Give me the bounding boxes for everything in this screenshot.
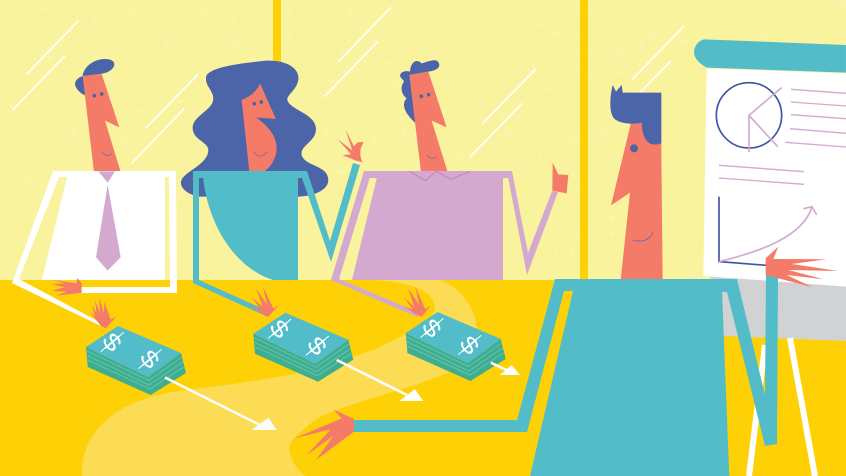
glass reflections bbox=[13, 7, 684, 163]
presenter bbox=[294, 85, 838, 476]
line chart bbox=[719, 197, 817, 265]
thumbs up hand bbox=[552, 163, 568, 193]
text lines bbox=[719, 89, 846, 184]
woman raised hand bbox=[338, 130, 364, 162]
tie bbox=[96, 171, 121, 271]
stack edges bbox=[253, 334, 353, 382]
window posts bbox=[273, 0, 588, 285]
money stack 1 bbox=[86, 326, 186, 395]
white shirt and arms bbox=[12, 171, 177, 327]
presenter face bbox=[611, 120, 663, 280]
hand on money bbox=[89, 297, 116, 328]
table bbox=[0, 280, 846, 476]
presenter pointing hand bbox=[766, 247, 838, 287]
dollar sign: $ bbox=[135, 344, 166, 374]
lilac man head bbox=[409, 72, 448, 172]
presenter hair bbox=[610, 85, 661, 145]
dollar sign: $ bbox=[417, 313, 448, 343]
bill top bbox=[253, 313, 348, 364]
woman teal top and arms bbox=[193, 163, 360, 317]
dollar sign: $ bbox=[302, 331, 333, 361]
woman hand on money bbox=[250, 286, 279, 317]
pie chart bbox=[716, 83, 782, 152]
light reflection on table bbox=[82, 280, 477, 476]
arrow from stack 2 bbox=[337, 360, 423, 401]
stack edges bbox=[86, 347, 186, 395]
arrow from stack 3 bbox=[491, 363, 520, 375]
money stack 3 bbox=[406, 312, 506, 381]
dollar sign: $ bbox=[454, 330, 485, 360]
woman face bbox=[242, 83, 277, 172]
bill top bbox=[406, 312, 501, 363]
man in lilac sweater bbox=[331, 60, 568, 317]
chart top bar bbox=[694, 39, 846, 73]
flipchart stand bbox=[710, 276, 846, 476]
lilac man hand on money bbox=[403, 286, 431, 317]
money stack 2 bbox=[253, 313, 353, 382]
man with tie bbox=[12, 59, 177, 328]
arrow from stack 1 bbox=[165, 378, 277, 430]
bill top bbox=[86, 326, 181, 377]
curly hair bbox=[400, 60, 439, 123]
presenter teal body and arms bbox=[354, 275, 778, 476]
dollar sign: $ bbox=[264, 314, 295, 344]
collar bbox=[409, 171, 470, 181]
chart paper bbox=[703, 68, 846, 287]
hand on table bbox=[51, 278, 82, 296]
window wall background bbox=[0, 0, 846, 285]
dollar sign: $ bbox=[97, 327, 128, 357]
presenter reaching hand bbox=[294, 409, 354, 460]
flipchart bbox=[694, 39, 846, 287]
woman hair bbox=[181, 61, 328, 197]
woman bbox=[181, 61, 364, 317]
man head bbox=[83, 74, 121, 172]
presenter eye and smile bbox=[630, 144, 653, 241]
man hair bbox=[75, 59, 114, 96]
stack edges bbox=[406, 333, 506, 381]
lilac sweater and arms bbox=[331, 171, 558, 317]
